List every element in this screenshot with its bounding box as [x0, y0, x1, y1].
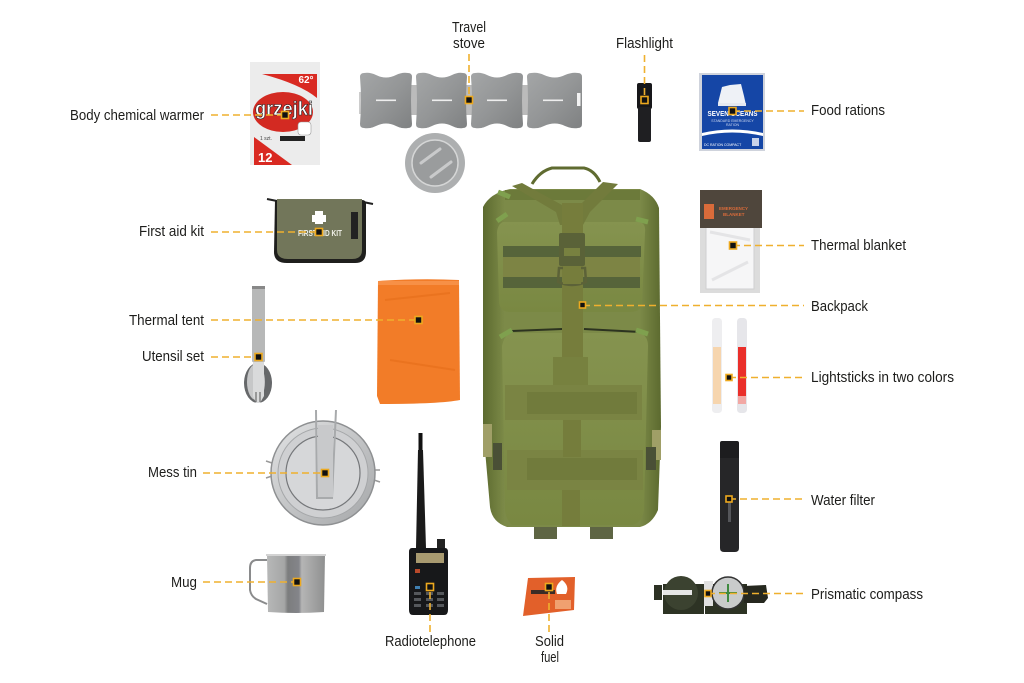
label: water filter [726, 493, 875, 509]
icon: thermal tent [377, 279, 460, 404]
label: radiotelephone [385, 584, 476, 650]
icon: food rations: STANDARD EMERGENCY [711, 119, 754, 123]
centre strap [512, 182, 618, 225]
icon: thermal blanket: BLANKET [723, 212, 745, 217]
label: flashlight [616, 36, 673, 104]
label: lightsticks in two colors [726, 370, 954, 386]
icon: body chemical warmer: grzejki [255, 99, 313, 120]
icon: body chemical warmer: 62° [298, 75, 314, 86]
icon: body chemical warmer [250, 62, 320, 165]
side straps [483, 424, 492, 457]
label: body chemical warmer [70, 108, 288, 124]
label: mess tin: Mess tin [148, 465, 197, 481]
label: first aid kit: First aid kit [139, 224, 204, 240]
icon: travel stove panels [359, 73, 582, 128]
webbing [505, 385, 642, 420]
bottom tabs [534, 527, 557, 539]
label: backpack: Backpack [811, 299, 869, 315]
handle [532, 168, 600, 184]
icon: food rations: RATION [726, 123, 739, 127]
lower pocket [502, 333, 648, 525]
icon: water filter [720, 441, 739, 552]
label: radiotelephone: Radiotelephone [385, 634, 476, 650]
label: prismatic compass [705, 587, 923, 603]
top pocket [497, 222, 645, 312]
label: flashlight: Flashlight [616, 36, 673, 52]
label: lightsticks in two colors: Lightsticks in two colors [811, 370, 954, 386]
label: body chemical warmer: Body chemical warmer [70, 108, 204, 124]
icon: thermal blanket: EMERGENCY [719, 206, 748, 211]
label: solid fuel: Solid [535, 634, 564, 650]
label: first aid kit [139, 224, 322, 240]
body [483, 189, 661, 527]
icon: food rations: DC RATION COMPACT [704, 143, 742, 147]
label: prismatic compass: Prismatic compass [811, 587, 923, 603]
label: thermal tent [129, 313, 422, 329]
label: utensil set: Utensil set [142, 349, 204, 365]
icon: mug [250, 554, 326, 613]
icon: food rations [699, 73, 765, 151]
icon: prismatic compass [654, 576, 768, 614]
icon: body chemical warmer: 1 szt. [260, 136, 272, 142]
icon: lightsticks [712, 318, 747, 413]
label: food rations: Food rations [811, 103, 885, 119]
label: food rations [729, 103, 885, 119]
label: solid fuel: fuel [541, 650, 559, 666]
label: travel stove: stove [453, 36, 485, 52]
icon: body chemical warmer: 12 [258, 150, 272, 165]
icon: thermal blanket [700, 190, 762, 293]
icon: utensil set [244, 286, 272, 403]
label: mug [171, 575, 300, 591]
icon: travel stove disc [405, 133, 465, 193]
label: travel stove: Travel [452, 20, 486, 36]
label: backpack [580, 299, 869, 315]
buckle [559, 233, 585, 266]
label: mess tin [148, 465, 328, 481]
icon: solid fuel box [523, 577, 575, 616]
icon: flashlight [637, 83, 652, 142]
icon: first aid kit [267, 199, 373, 263]
zip pulls [497, 192, 648, 337]
icon: mess tin [266, 410, 380, 525]
label: thermal blanket [730, 238, 906, 254]
label: thermal blanket: Thermal blanket [811, 238, 906, 254]
icon: backpack [483, 168, 661, 539]
icon: radiotelephone [409, 433, 448, 615]
label: travel stove [452, 20, 486, 104]
label: utensil set [142, 349, 262, 365]
label: solid fuel [535, 584, 564, 666]
label: water filter: Water filter [811, 493, 875, 509]
icon: food rations: SEVEN OCEANS [708, 109, 758, 118]
icon: first aid kit: FIRST AID KIT [298, 229, 342, 238]
label: mug: Mug [171, 575, 197, 591]
label: thermal tent: Thermal tent [129, 313, 204, 329]
